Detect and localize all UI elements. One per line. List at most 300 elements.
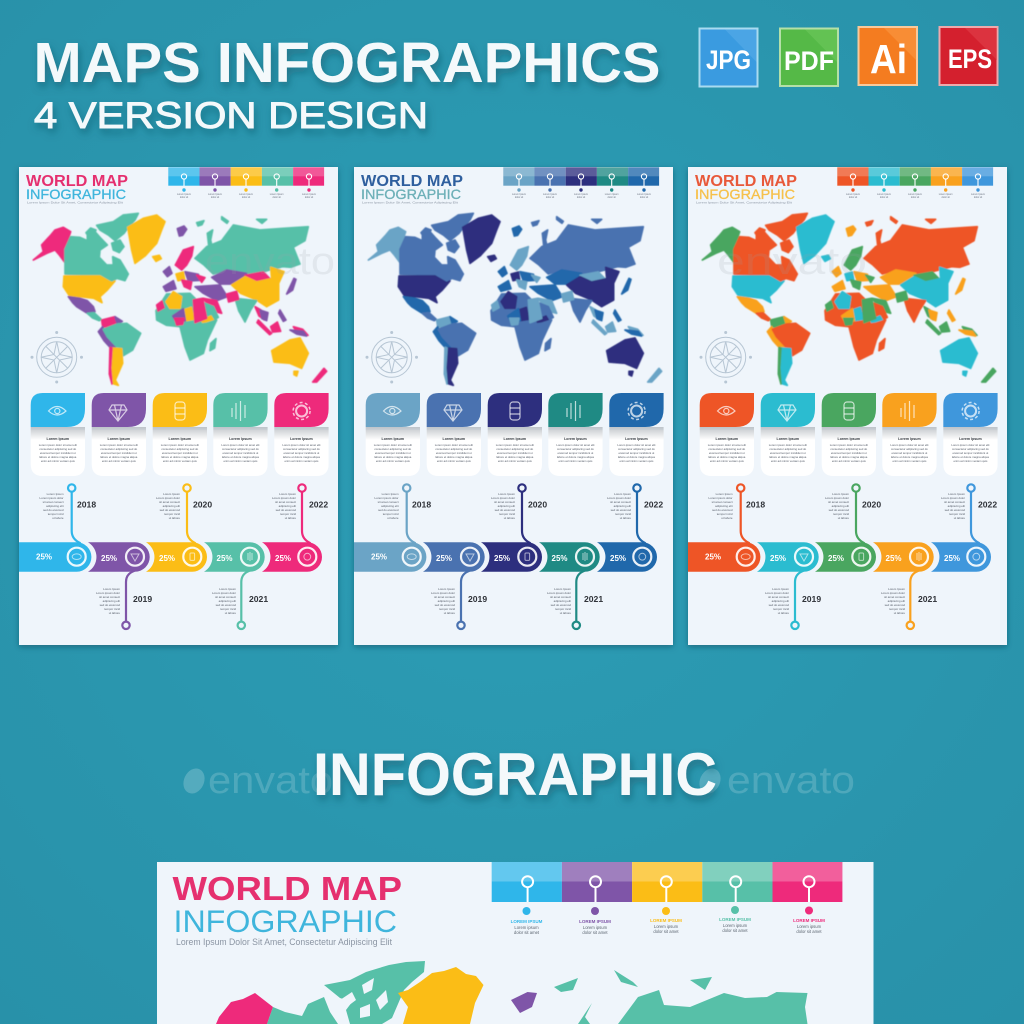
colour tabs: dolor sit [305,196,314,199]
colour tabs: Lorem Ipsum [605,193,619,196]
timeline: 2019 [802,594,821,604]
info cards: enim ad minim veniam quis [892,459,927,463]
timeline: 25% [436,554,452,563]
timeline: sit amet consect [944,500,965,504]
timeline: 2020 [862,500,881,510]
timeline: adipiscing elit [438,599,455,603]
panel heading: Lorem Ipsum Dolor Sit Amet, Consectetur Adipiscing Elit [27,200,123,204]
timeline: 2021 [249,594,268,604]
timeline: sit amet consect [159,500,180,504]
timeline: sit amet consect [43,500,64,504]
preview heading: WORLD MAP [172,870,402,907]
timeline: sed do eiusmod [829,508,849,512]
timeline [688,484,997,629]
info cards: Lorem Ipsum [625,437,648,441]
timeline: adipiscing elit [772,599,789,603]
info cards: consectetur adipiscing sed do [100,447,138,451]
panel heading: INFOGRAPHIC [361,186,461,202]
timeline: tempor incid [499,512,515,516]
info cards: Lorem ipsum dolor sit amet elit [374,443,412,447]
info cards: eiusmod tempor incididunt ut [284,451,319,455]
timeline: 2022 [978,500,997,510]
info cards: enim ad minim veniam quis [284,459,319,463]
colour tabs: Lorem Ipsum [939,193,953,196]
timeline: sit amet consect [828,500,849,504]
timeline: tempor incid [280,512,296,516]
colour tabs: Lorem Ipsum [302,193,316,196]
timeline: sed do eiusmod [216,603,236,607]
timeline: adipiscing elit [219,599,236,603]
info cards: labore et dolore magna aliqua [618,455,655,459]
info cards: eiusmod tempor incididunt ut [558,451,593,455]
timeline: 2018 [77,500,96,510]
timeline: ut labore [560,611,571,615]
timeline: sit amet consect [434,595,455,599]
timeline: ut labore [285,516,296,520]
panel: warm version [688,167,1007,645]
timeline: sed do eiusmod [378,508,399,512]
colour tabs: Lorem Ipsum [637,193,651,196]
colour tabs [837,167,993,199]
colour tabs: dolor sit [546,196,555,199]
panel: colourful version [19,167,338,645]
info cards: enim ad minim veniam quis [102,459,136,463]
panel heading: INFOGRAPHIC [26,186,126,202]
colour tabs [503,167,659,199]
panel heading: WORLD MAP [26,173,128,190]
panel background [688,167,1007,645]
panel background [354,167,673,645]
timeline: sed do eiusmod [611,508,631,512]
timeline: 25% [216,554,233,563]
panel heading: WORLD MAP [695,173,797,190]
info cards [700,393,998,476]
preview background [157,862,874,1024]
timeline: 2020 [528,500,547,510]
timeline: 25% [944,554,960,563]
info cards: Lorem ipsum dolor sit amet elit [556,443,595,447]
info cards: Lorem Ipsum [169,437,191,441]
info cards: eiusmod tempor incididunt ut [497,451,533,455]
timeline: ut labore [387,516,399,520]
watermark: envato [205,241,335,283]
timeline: ut labore [444,611,455,615]
info cards: enim ad minim veniam quis [376,459,410,463]
info cards: Lorem Ipsum [838,437,860,441]
info cards: enim ad minim veniam quis [558,459,593,463]
colour tabs: dolor sit [515,196,524,199]
timeline: Lorem Ipsum [47,492,64,496]
info cards: eiusmod tempor incididunt ut [831,451,867,455]
preview colour tabs: dolor sit amet [582,930,608,935]
colour tabs: dolor sit [608,196,616,199]
info cards: enim ad minim veniam quis [41,459,75,463]
info cards: Lorem ipsum dolor sit amet elit [708,443,746,447]
icon: Ai badge [858,27,917,85]
info cards: labore et dolore magna aliqua [891,455,928,459]
info cards: Lorem ipsum dolor sit amet elit [100,443,138,447]
info cards: eiusmod tempor incididunt ut [892,451,927,455]
info cards: consectetur adipiscing sed do [496,447,534,451]
timeline: Lorem ipsum dolor [765,591,789,595]
timeline: tempor incid [220,607,236,611]
colour tabs [168,167,324,199]
preview colour tabs: Lorem ipsum [514,925,539,930]
info cards: Lorem ipsum dolor sit amet elit [951,443,990,447]
timeline: Lorem ipsum dolor [272,496,296,500]
timeline: sed do eiusmod [43,508,64,512]
panel background [19,167,338,645]
timeline: sed do eiusmod [100,603,120,607]
icon: compass [700,331,752,384]
timeline: Lorem Ipsum [382,492,399,496]
info cards: eiusmod tempor incididunt ut [709,451,745,455]
info cards: enim ad minim veniam quis [163,459,197,463]
info cards: consectetur adipiscing sed do [891,447,928,451]
timeline: sit amet consect [768,595,789,599]
colour tabs: Lorem Ipsum [512,193,526,196]
timeline: Lorem Ipsum [103,587,121,591]
panel heading: INFOGRAPHIC [695,186,795,202]
timeline: sit amet consect [215,595,236,599]
info cards: Lorem Ipsum [898,437,921,441]
watermark left: envato [208,760,333,802]
timeline: 25% [770,554,786,563]
timeline [354,484,663,629]
timeline: adipiscing elit [948,504,965,508]
timeline: 25% [36,552,52,562]
timeline: ut labore [838,516,849,520]
info cards: consectetur adipiscing sed do [708,447,746,451]
preview colour tabs: LOREM IPSUM [719,917,751,922]
colour tabs: Lorem Ipsum [177,193,191,196]
timeline: tempor incid [104,607,120,611]
timeline: 25% [552,554,568,563]
timeline: Lorem Ipsum [716,492,733,496]
timeline: 2019 [468,594,487,604]
info cards: consectetur adipiscing sed do [374,447,412,451]
preview world map [216,961,808,1024]
timeline: Lorem Ipsum [948,492,966,496]
info cards: Lorem Ipsum [290,437,313,441]
world map [702,213,996,385]
colour tabs: Lorem Ipsum [971,193,985,196]
timeline: Lorem ipsum dolor [96,591,120,595]
info cards: consectetur adipiscing sed do [283,447,320,451]
timeline: 25% [371,552,387,562]
info cards: eiusmod tempor incididunt ut [953,451,988,455]
timeline: tempor incid [717,512,733,516]
timeline: tempor incid [889,607,905,611]
info cards: enim ad minim veniam quis [619,459,654,463]
info cards: labore et dolore magna aliqua [161,455,199,459]
info cards: enim ad minim veniam quis [437,459,471,463]
colour tabs: dolor sit [577,196,586,199]
section heading: INFOGRAPHIC [313,741,717,808]
timeline: Lorem Ipsum [888,587,906,591]
colour tabs: dolor sit [942,196,950,199]
info cards: labore et dolore magna aliqua [708,455,746,459]
info cards: labore et dolore magna aliqua [557,455,594,459]
timeline: Lorem ipsum dolor [607,496,631,500]
timeline: ut labore [778,611,789,615]
timeline: Lorem ipsum dolor [212,591,236,595]
info cards: consectetur adipiscing sed do [39,447,77,451]
timeline: tempor incid [439,607,455,611]
preview colour tabs: LOREM IPSUM [793,918,825,923]
panel heading [695,173,797,204]
info cards: Lorem Ipsum [443,437,465,441]
timeline: Lorem Ipsum [614,492,632,496]
info cards: consectetur adipiscing sed do [952,447,989,451]
timeline: Lorem ipsum dolor [375,496,399,500]
timeline: ut labore [169,516,180,520]
colour tabs: dolor sit [180,196,189,199]
info cards: Lorem Ipsum [108,437,130,441]
info cards: eiusmod tempor incididunt ut [770,451,806,455]
info cards: consectetur adipiscing sed do [557,447,594,451]
panel heading: Lorem Ipsum Dolor Sit Amet, Consectetur Adipiscing Elit [362,200,458,204]
info cards: labore et dolore magna aliqua [830,455,868,459]
timeline: tempor incid [555,607,571,611]
timeline: Lorem Ipsum [554,587,572,591]
timeline: ut labore [620,516,631,520]
info cards: labore et dolore magna aliqua [496,455,534,459]
info cards: labore et dolore magna aliqua [39,455,77,459]
timeline: sit amet consect [550,595,571,599]
info cards: Lorem Ipsum [959,437,982,441]
timeline: ut labore [504,516,515,520]
timeline: sed do eiusmod [945,508,965,512]
timeline: ut labore [954,516,965,520]
timeline [19,484,328,629]
title: MAPS INFOGRAPHICS [34,31,660,95]
info cards: labore et dolore magna aliqua [435,455,473,459]
panel: enlarged preview [157,862,874,1024]
timeline: 25% [101,554,117,563]
info cards: consectetur adipiscing sed do [618,447,655,451]
timeline: adipiscing elit [614,504,631,508]
panel heading: Lorem Ipsum Dolor Sit Amet, Consectetur Adipiscing Elit [696,200,792,204]
timeline: Lorem Ipsum [832,492,850,496]
timeline: Lorem Ipsum [163,492,181,496]
timeline: sit amet consect [712,500,733,504]
icon: PDF badge: PDF [784,46,834,76]
preview colour tabs [492,862,842,935]
colour tabs: Lorem Ipsum [543,193,557,196]
info cards: Lorem ipsum dolor sit amet elit [39,443,77,447]
info cards: eiusmod tempor incididunt ut [223,451,258,455]
preview colour tabs: dolor sit amet [722,928,748,933]
icon: JPG badge [700,28,758,86]
info cards: consectetur adipiscing sed do [830,447,868,451]
timeline: Lorem Ipsum [438,587,456,591]
info cards: consectetur adipiscing sed do [769,447,807,451]
info cards: Lorem ipsum dolor sit amet elit [769,443,807,447]
timeline: 2022 [309,500,328,510]
preview colour tabs: dolor sit amet [796,929,822,934]
colour tabs: Lorem Ipsum [574,193,588,196]
icon: EPS badge: EPS [948,44,992,74]
timeline: 2022 [644,500,663,510]
info cards: Lorem Ipsum [504,437,526,441]
timeline: sit amet consect [610,500,631,504]
timeline: tempor incid [949,512,965,516]
info cards: consectetur adipiscing sed do [161,447,199,451]
preview colour tabs: dolor sit amet [514,930,540,935]
world map [368,213,662,385]
preview colour tabs: Lorem ipsum [723,923,748,928]
timeline: tempor incid [164,512,180,516]
timeline: 25% [275,554,291,563]
timeline: 2021 [918,594,937,604]
info cards: Lorem ipsum dolor sit amet elit [617,443,656,447]
panel heading [26,173,128,204]
info cards: Lorem Ipsum [777,437,799,441]
colour tabs: Lorem Ipsum [846,193,860,196]
info cards: Lorem ipsum dolor sit amet elit [221,443,260,447]
timeline: Lorem ipsum dolor [491,496,515,500]
preview colour tabs: Lorem ipsum [797,924,822,929]
timeline: sit amet consect [275,500,296,504]
info cards: Lorem ipsum dolor sit amet elit [161,443,199,447]
panel heading [361,173,463,204]
timeline: adipiscing elit [163,504,180,508]
world map [33,213,327,385]
info cards: eiusmod tempor incididunt ut [436,451,472,455]
info cards: Lorem ipsum dolor sit amet elit [435,443,473,447]
timeline: sed do eiusmod [495,508,515,512]
timeline: adipiscing elit [381,504,399,508]
timeline: ut labore [109,611,120,615]
info cards: Lorem Ipsum [564,437,587,441]
timeline: tempor incid [383,512,399,516]
timeline: adipiscing elit [715,504,733,508]
timeline: sit amet consect [99,595,120,599]
info cards: enim ad minim veniam quis [223,459,258,463]
preview colour tabs: LOREM IPSUM [511,919,543,924]
info cards: consectetur adipiscing sed do [435,447,473,451]
timeline: Lorem ipsum dolor [156,496,180,500]
timeline: 25% [494,554,510,563]
timeline: adipiscing elit [554,599,571,603]
timeline: Lorem Ipsum [498,492,516,496]
timeline: 2018 [412,500,431,510]
colour tabs: dolor sit [640,196,649,199]
timeline: tempor incid [615,512,631,516]
icon: EPS badge [940,27,998,85]
info cards: Lorem ipsum dolor sit amet elit [890,443,929,447]
timeline: sit amet consect [884,595,905,599]
timeline: 25% [828,554,844,563]
icon: compass [366,331,418,384]
info cards: Lorem Ipsum [382,437,404,441]
timeline: sed do eiusmod [276,508,296,512]
timeline: Lorem Ipsum [219,587,237,591]
info cards: labore et dolore magna aliqua [283,455,320,459]
timeline: Lorem Ipsum [279,492,297,496]
timeline: Lorem Ipsum [772,587,790,591]
timeline: 25% [610,554,626,563]
colour tabs: dolor sit [974,196,983,199]
timeline: tempor incid [833,512,849,516]
icon: PDF badge [780,28,838,86]
timeline: sit amet consect [494,500,515,504]
info cards: eiusmod tempor incididunt ut [375,451,411,455]
timeline: ut labore [894,611,905,615]
timeline: adipiscing elit [888,599,905,603]
timeline: 2018 [746,500,765,510]
info cards: enim ad minim veniam quis [498,459,532,463]
timeline: 25% [159,554,175,563]
colour tabs: Lorem Ipsum [877,193,891,196]
timeline: sit amet consect [378,500,399,504]
colour tabs: dolor sit [911,196,920,199]
info cards: labore et dolore magna aliqua [769,455,807,459]
info cards [31,393,329,476]
info cards: Lorem ipsum dolor sit amet elit [830,443,868,447]
colour tabs: dolor sit [211,196,220,199]
colour tabs: dolor sit [849,196,858,199]
colour tabs: dolor sit [273,196,281,199]
timeline: tempor incid [48,512,64,516]
timeline: sed do eiusmod [435,603,455,607]
info cards: eiusmod tempor incididunt ut [101,451,137,455]
info cards: labore et dolore magna aliqua [374,455,412,459]
timeline: 2020 [193,500,212,510]
timeline: Lorem ipsum dolor [709,496,733,500]
colour tabs: dolor sit [242,196,251,199]
info cards: enim ad minim veniam quis [832,459,866,463]
timeline: adipiscing elit [498,504,515,508]
timeline: adipiscing elit [279,504,296,508]
timeline: adipiscing elit [832,504,849,508]
colour tabs: dolor sit [880,196,889,199]
timeline: ut labore [225,611,236,615]
colour tabs: Lorem Ipsum [908,193,922,196]
info cards: Lorem ipsum dolor sit amet elit [282,443,321,447]
panel heading: WORLD MAP [361,173,463,190]
icon: Ai badge: Ai [870,36,907,82]
info cards: labore et dolore magna aliqua [952,455,989,459]
info cards: consectetur adipiscing sed do [222,447,259,451]
timeline: sed do eiusmod [160,508,180,512]
info cards: Lorem Ipsum [47,437,69,441]
preview heading: INFOGRAPHIC [174,903,397,939]
icon: compass [30,331,83,384]
timeline: 25% [705,552,721,562]
timeline: ut labore [52,516,64,520]
timeline: 2021 [584,594,603,604]
info cards [366,393,664,476]
timeline: Lorem ipsum dolor [825,496,849,500]
info cards: Lorem Ipsum [716,437,738,441]
watermark: envato [717,241,867,283]
timeline: adipiscing elit [103,599,120,603]
info cards: enim ad minim veniam quis [953,459,988,463]
timeline: Lorem ipsum dolor [40,496,64,500]
timeline: sed do eiusmod [885,603,905,607]
info cards: enim ad minim veniam quis [771,459,805,463]
watermark right: envato [727,760,855,802]
info cards: eiusmod tempor incididunt ut [40,451,76,455]
timeline: 25% [886,554,902,563]
timeline: Lorem ipsum dolor [881,591,905,595]
info cards: eiusmod tempor incididunt ut [619,451,654,455]
preview colour tabs: Lorem ipsum [654,924,679,929]
info cards: Lorem ipsum dolor sit amet elit [496,443,534,447]
preview colour tabs: LOREM IPSUM [579,919,611,924]
